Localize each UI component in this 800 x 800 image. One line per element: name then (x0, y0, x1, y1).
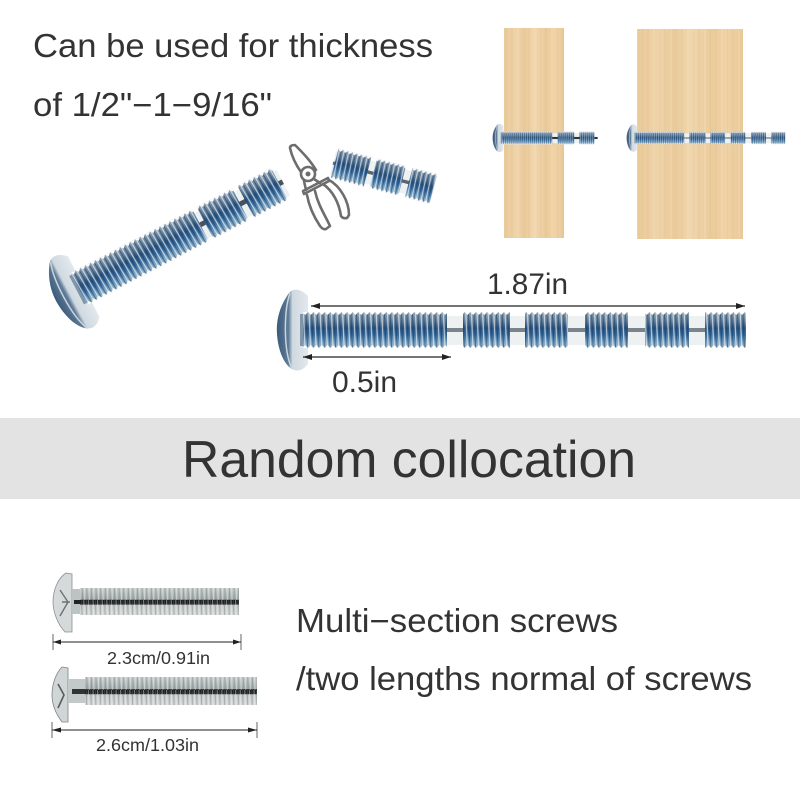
text: screw description: Multi−section screws (296, 602, 618, 639)
long grey screw with dimension: 2.6cm/1.03in (96, 735, 199, 755)
main multi-section screw (277, 290, 746, 371)
icon: pliers (290, 145, 349, 229)
cut-off screw fragment (329, 148, 437, 204)
banner: random collocation: Random collocation (182, 431, 636, 489)
dimension arrow: 1.87in: 1.87in (487, 268, 568, 301)
short grey screw with dimension (53, 573, 241, 668)
heading: thickness range (33, 27, 433, 123)
short grey screw with dimension: 2.3cm/0.91in (107, 648, 210, 668)
long grey screw with dimension (52, 667, 257, 755)
tilted screw cut section (37, 146, 302, 337)
dimension arrow: 1.87in (311, 268, 745, 309)
dimension arrow: 0.5in (303, 354, 451, 399)
text: screw description: /two lengths normal of screws (296, 660, 752, 697)
heading: thickness range: Can be used for thickness (33, 27, 433, 64)
panel: thin wood board with screw (493, 28, 598, 238)
dimension arrow: 0.5in: 0.5in (332, 366, 397, 399)
banner: random collocation (0, 418, 800, 499)
heading: thickness range: of 1/2"−1−9/16" (33, 86, 272, 123)
panel: thick wood board with screw (627, 29, 785, 239)
text: screw description (296, 602, 752, 697)
